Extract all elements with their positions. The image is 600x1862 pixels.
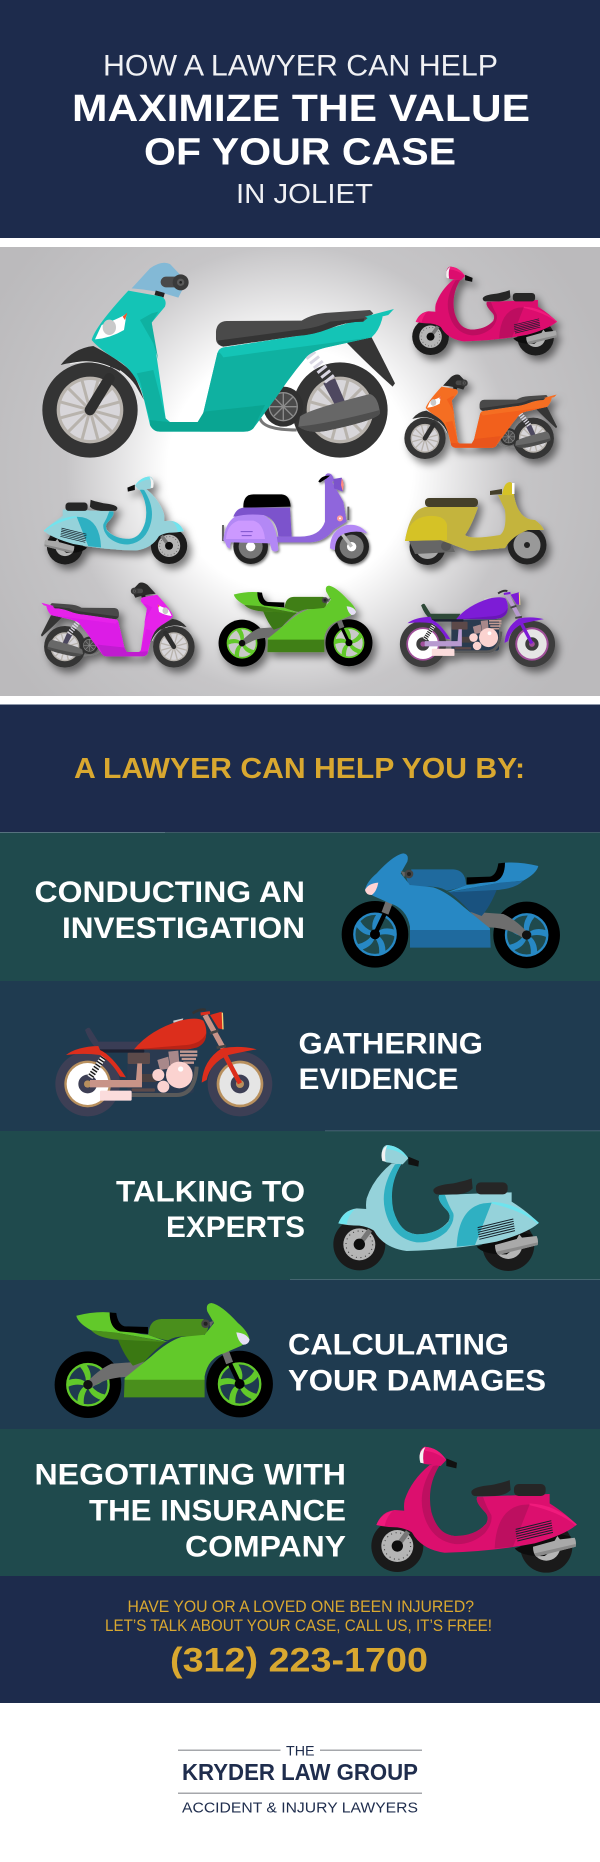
panel: lawyer can help heading xyxy=(0,704,600,832)
icon: light blue vespa xyxy=(333,1145,538,1271)
icon: yellow vespa xyxy=(405,482,546,565)
label xyxy=(34,1458,346,1564)
icon: purple vespa xyxy=(222,473,369,564)
panel: call to action xyxy=(0,1576,600,1703)
label xyxy=(288,1328,546,1398)
icon: green sport bike xyxy=(55,1303,273,1418)
label: THE INSURANCE xyxy=(89,1494,346,1528)
icon: orange scooter xyxy=(404,375,557,459)
panel: title header xyxy=(0,0,600,238)
panel: calculating your damages xyxy=(0,1280,600,1429)
panel: conducting an investigation xyxy=(0,832,600,981)
call to action text: LET’S TALK ABOUT YOUR CASE, CALL US, IT’S FREE! xyxy=(105,1617,492,1635)
panel: negotiating with the insurance company xyxy=(0,1429,600,1576)
panel: motorcycles illustration xyxy=(0,247,600,696)
call to action text xyxy=(105,1598,492,1635)
label: INVESTIGATION xyxy=(62,912,305,945)
icon: magenta scooter xyxy=(41,583,195,668)
logo: the kryder law group: THE xyxy=(286,1742,314,1758)
panel: gathering evidence xyxy=(0,981,600,1131)
label: EXPERTS xyxy=(166,1211,305,1244)
icon: large teal scooter xyxy=(42,263,395,458)
icon: blue sport bike xyxy=(342,853,560,968)
icon: purple cruiser xyxy=(400,591,555,667)
title line 2: MAXIMIZE THE VALUE xyxy=(72,88,530,130)
heading: A LAWYER CAN HELP YOU BY: xyxy=(74,753,525,785)
title line 3: OF YOUR CASE xyxy=(144,132,456,174)
label xyxy=(298,1028,483,1096)
label xyxy=(116,1176,305,1244)
logo: the kryder law group xyxy=(178,1742,422,1816)
label: NEGOTIATING WITH xyxy=(34,1458,346,1492)
icon: light blue vespa xyxy=(44,476,187,564)
logo: the kryder law group: ACCIDENT & INJURY LAWYERS xyxy=(182,1799,418,1816)
phone number: (312) 223-1700 xyxy=(170,1642,428,1680)
icon: small pink vespa xyxy=(412,267,557,355)
panel: talking to experts xyxy=(0,1130,600,1280)
label: GATHERING xyxy=(298,1028,483,1060)
label: EVIDENCE xyxy=(298,1063,458,1096)
icon: red cruiser motorcycle xyxy=(55,1010,272,1116)
title line 1: HOW A LAWYER CAN HELP xyxy=(103,50,498,82)
icon: pink vespa xyxy=(371,1447,576,1573)
call to action text: HAVE YOU OR A LOVED ONE BEEN INJURED? xyxy=(128,1598,474,1616)
label: TALKING TO xyxy=(116,1176,305,1208)
label: COMPANY xyxy=(185,1530,346,1564)
label: YOUR DAMAGES xyxy=(288,1364,546,1398)
label: CONDUCTING AN xyxy=(34,876,305,909)
logo: the kryder law group: KRYDER LAW GROUP xyxy=(182,1759,418,1785)
label: CALCULATING xyxy=(288,1328,509,1362)
icon: green sport bike xyxy=(219,586,372,667)
label xyxy=(34,876,305,945)
title line 4: IN JOLIET xyxy=(236,178,373,209)
